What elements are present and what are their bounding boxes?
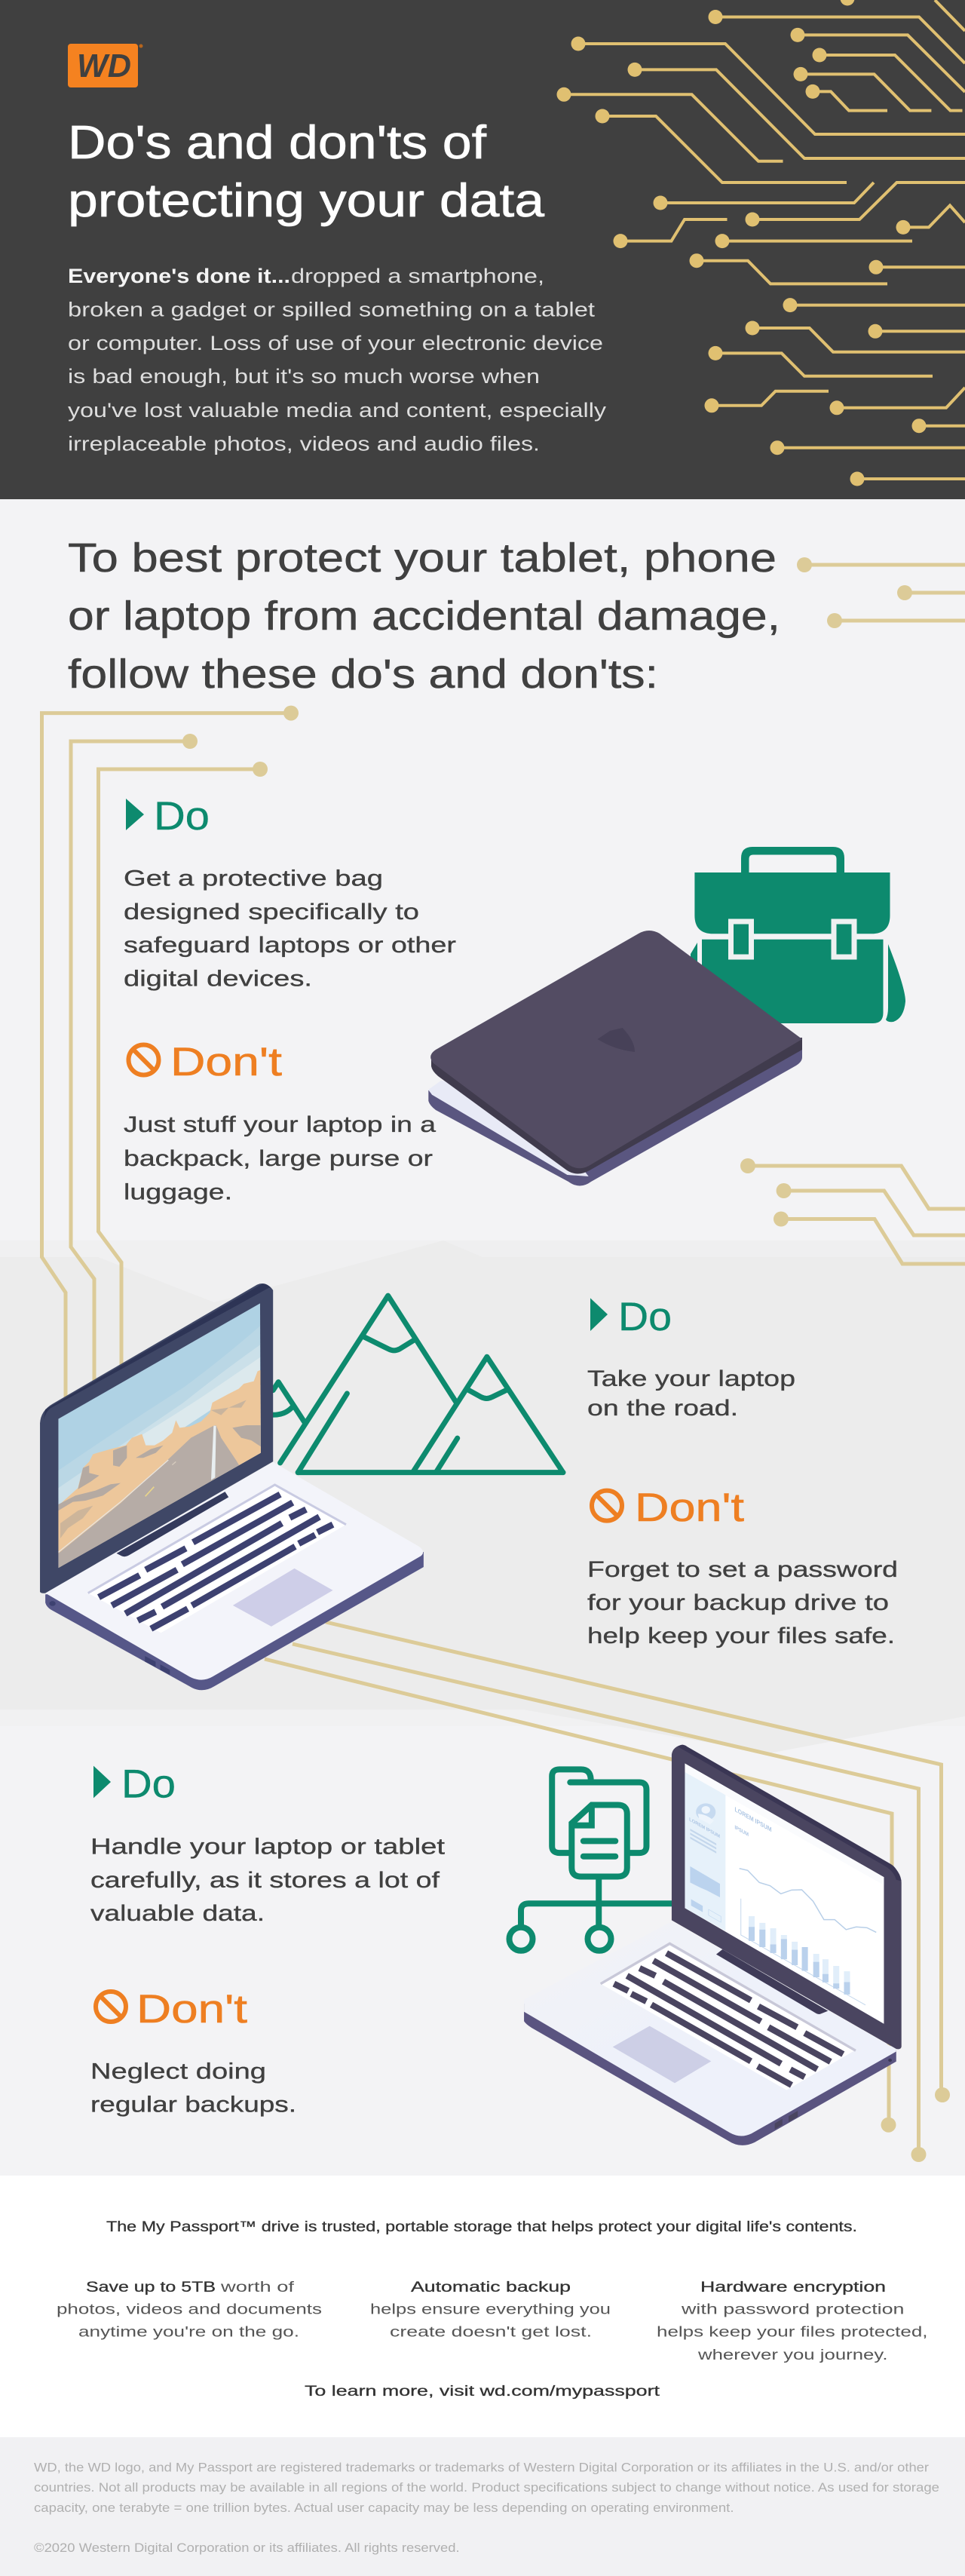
panel: dark header: [0, 0, 965, 499]
title: Do's and don'ts of: [68, 117, 487, 169]
feature: encryption: Hardware encryption: [700, 2279, 886, 2295]
feature: backup: helps ensure everything you: [370, 2302, 611, 2318]
logo: WD: [68, 44, 143, 87]
feature: encryption: wherever you journey.: [697, 2347, 888, 2363]
dont text 1: Just stuff your laptop in a: [124, 1112, 436, 1137]
do heading 2: Do: [618, 1295, 672, 1339]
feature: storage: photos, videos and documents: [57, 2302, 322, 2318]
intro text: or computer. Loss of use of your electronic device: [68, 332, 603, 354]
dont heading 1: [128, 1040, 282, 1084]
dont text 2: Forget to set a password: [587, 1557, 898, 1582]
do heading 2: [590, 1295, 672, 1339]
dont text 3: [90, 2059, 296, 2118]
legal text: countries. Not all products may be available in all regions of the world. Product specifications subject to change without notice. As used for storage: [34, 2480, 939, 2495]
legal text: capacity, one terabyte = one trillion bytes. Actual user capacity may be less depending on operating environment.: [34, 2501, 734, 2515]
icon: bag: [691, 847, 905, 1023]
heading: section intro: [68, 535, 780, 697]
feature: storage: worth of: [220, 2279, 295, 2295]
do text 1: [124, 866, 456, 992]
dont heading 3: Don't: [136, 1987, 247, 2032]
intro text: Everyone's done it...: [68, 265, 290, 287]
dont text 2: for your backup drive to: [587, 1590, 889, 1615]
title: [68, 117, 545, 227]
heading: section intro: follow these do's and don'ts:: [68, 652, 658, 697]
panel: product footer: [0, 2176, 965, 2437]
panel: tip 3 data: [90, 1745, 902, 2145]
do text 1: Get a protective bag: [124, 866, 383, 891]
illustration: laptop with dashboard: LOREM IPSUM: [689, 1816, 720, 1839]
feature: backup: [370, 2279, 611, 2341]
keyboard keys: [99, 1495, 333, 1629]
do heading 1: [126, 794, 210, 839]
panel: main light background: [0, 499, 965, 2176]
do text 1: designed specifically to: [124, 900, 419, 925]
dont heading 3: [96, 1987, 247, 2032]
keyboard and trackpad: [601, 1943, 856, 2090]
dont text 1: luggage.: [124, 1180, 232, 1205]
panel: tip 1 bag: [124, 794, 905, 1205]
do text 2: on the road.: [587, 1396, 738, 1421]
legal text: ©2020 Western Digital Corporation or its affiliates. All rights reserved.: [34, 2541, 460, 2555]
do text 3: valuable data.: [90, 1901, 265, 1926]
intro text: [68, 265, 607, 455]
screen photo: [55, 1302, 264, 1571]
illustration: laptop with road photo: [40, 1283, 424, 1690]
illustration: laptop with dashboard: LOREM IPSUM: [735, 1806, 772, 1834]
dont text 1: [124, 1112, 436, 1205]
feature: storage: anytime you're on the go.: [78, 2324, 299, 2341]
legal text: WD, the WD logo, and My Passport are registered trademarks or trademarks of Western Digital Corporation or its affiliates in the U.S. and/or other: [34, 2460, 929, 2475]
feature: backup: create doesn't get lost.: [390, 2324, 592, 2341]
intro text: dropped a smartphone,: [291, 265, 544, 287]
intro text: broken a gadget or spilled something on a tablet: [68, 299, 596, 321]
call to action: To learn more, visit wd.com/mypassport: [305, 2383, 660, 2400]
feature: storage: [57, 2279, 322, 2341]
do heading 3: Do: [121, 1762, 176, 1807]
dont text 2: help keep your files safe.: [587, 1624, 895, 1648]
logo: WD: WD: [77, 48, 131, 84]
do heading 3: [93, 1762, 176, 1807]
dont text 2: [587, 1557, 898, 1648]
panel: legal footer: [0, 2437, 965, 2576]
title: protecting your data: [68, 175, 545, 227]
do heading 1: Do: [154, 794, 210, 839]
icon: folder network: [510, 1769, 675, 1951]
illustration: closed laptop: [428, 931, 802, 1185]
circuit traces: header: [556, 0, 965, 486]
do text 3: carefully, as it stores a lot of: [90, 1868, 440, 1893]
tagline: The My Passport™ drive is trusted, portable storage that helps protect your digital life's contents.: [106, 2219, 857, 2235]
dont heading 1: Don't: [170, 1040, 282, 1084]
feature: backup: Automatic backup: [411, 2279, 571, 2295]
dont text 3: Neglect doing: [90, 2059, 266, 2084]
intro text: irreplaceable photos, videos and audio files.: [68, 433, 540, 455]
intro text: is bad enough, but it's so much worse when: [68, 365, 540, 388]
icon: mountains: [273, 1296, 563, 1473]
dont heading 2: Don't: [635, 1486, 744, 1530]
dont text 1: backpack, large purse or: [124, 1146, 433, 1171]
dont heading 2: [592, 1486, 744, 1530]
do text 1: digital devices.: [124, 967, 312, 992]
do text 3: [90, 1835, 446, 1926]
illustration: laptop with dashboard: [524, 1745, 902, 2145]
feature: encryption: with password protection: [681, 2302, 905, 2318]
do text 2: [587, 1366, 795, 1421]
heading: section intro: or laptop from accidental damage,: [68, 593, 780, 639]
circuit traces: body: [42, 557, 965, 2162]
feature: encryption: helps keep your files protected,: [657, 2324, 927, 2341]
panel: tip 2 road: [40, 1283, 898, 1690]
intro text: you've lost valuable media and content, especially: [68, 399, 607, 422]
legal text: [34, 2460, 939, 2555]
heading: section intro: To best protect your tablet, phone: [68, 535, 777, 581]
do text 3: Handle your laptop or tablet: [90, 1835, 446, 1860]
feature: encryption: [657, 2279, 927, 2363]
do text 2: Take your laptop: [587, 1366, 795, 1391]
do text 1: safeguard laptops or other: [124, 933, 456, 958]
illustration: laptop with dashboard: IPSUM: [735, 1823, 749, 1838]
dont text 3: regular backups.: [90, 2093, 296, 2118]
feature: storage: Save up to 5TB: [86, 2279, 216, 2295]
